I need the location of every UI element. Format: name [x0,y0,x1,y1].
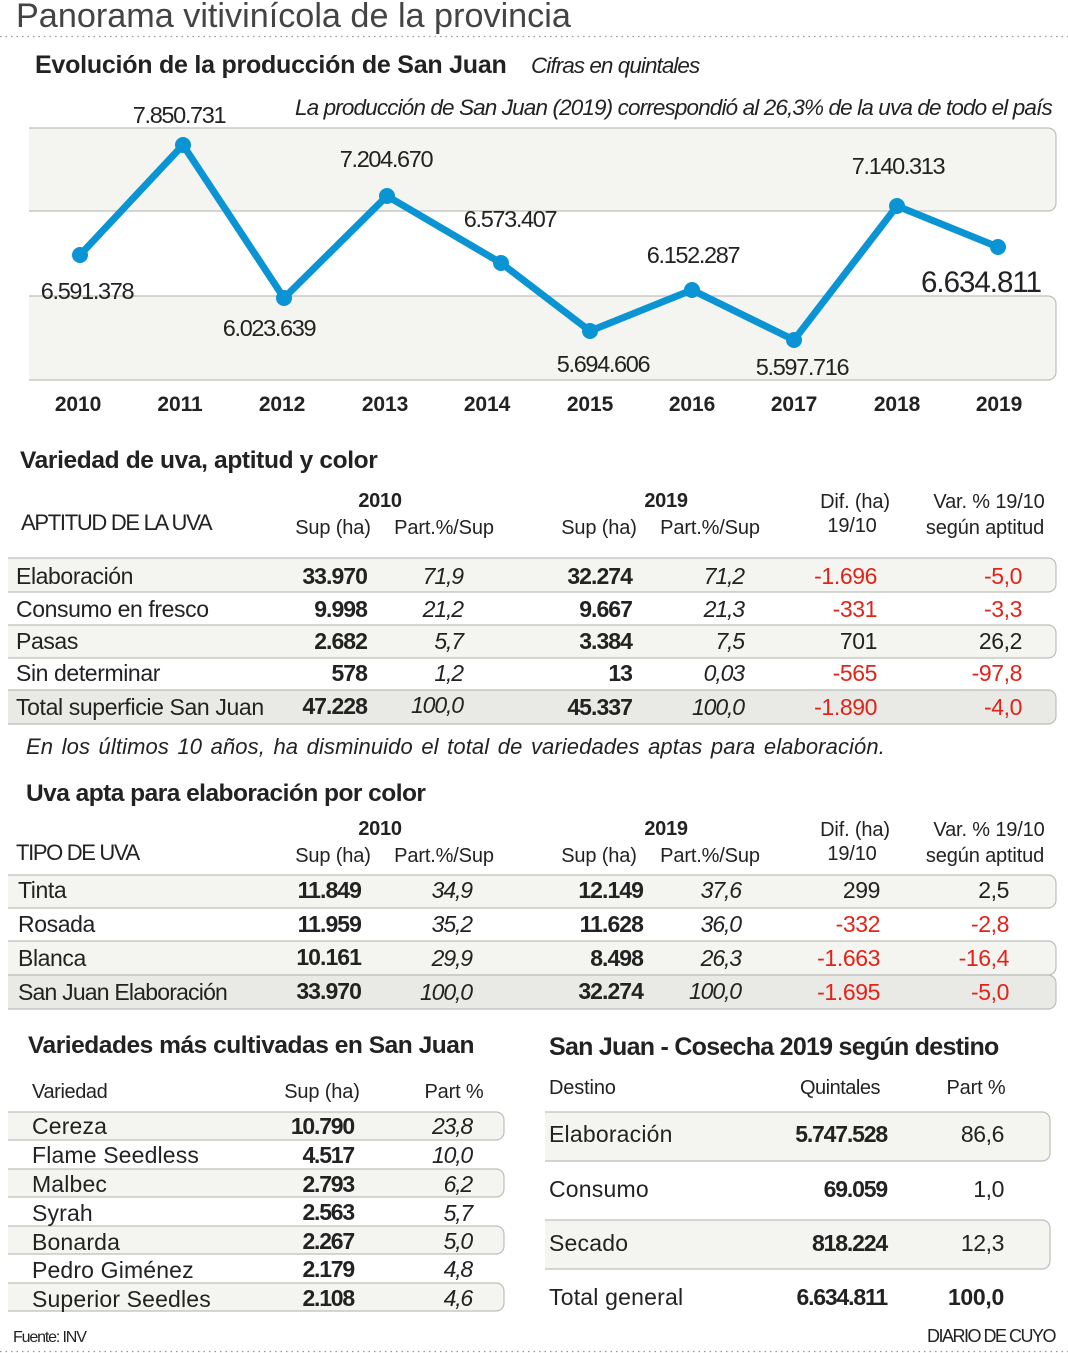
table header: Destino [549,1077,616,1099]
x axis years: 2014 [464,393,511,416]
row: Sin determinar: 1,2 [434,660,464,686]
row: Bonarda: 2.267 [302,1228,354,1254]
table header: 2019 [644,490,688,512]
data labels: 5.694.606 [557,351,650,377]
heading: varieties: Variedades más cultivadas en San Juan [28,1032,474,1059]
row: Syrah: 5,7 [444,1200,474,1226]
note: share of national grape: La producción de San Juan (2019) correspondió al 26,3% de la uva de todo el país [295,95,1052,120]
row: Sin determinar: 0,03 [704,660,745,686]
row: Syrah [32,1199,474,1226]
row: Rosada: 35,2 [432,911,473,937]
row: Pasas: Pasas [16,628,78,654]
row: San Juan Elaboración: 33.970 [296,978,361,1004]
row: San Juan Elaboración: San Juan Elaboración [18,979,227,1005]
row: Elaboración: 71,2 [704,563,745,589]
table header: Part.%/Sup [660,845,760,867]
row: Cereza: 23,8 [431,1113,473,1139]
table header: Var. % 19/10 [933,491,1045,513]
panel: most cultivated varieties [8,1032,504,1312]
row: Elaboración: 5.747.528 [795,1121,888,1147]
table header: Part % [424,1081,484,1103]
data labels: 6.573.407 [464,206,556,232]
row: Elaboración [16,563,1022,589]
row: Sin determinar: -565 [833,660,877,686]
table row bands [8,1112,504,1311]
heading: colour table: Uva apta para elaboración por color [26,780,426,807]
panel: grape variety, aptitude [8,447,1056,759]
row: Consumo: 69.059 [824,1176,887,1202]
table header [16,818,1045,867]
row: Blanca: -1.663 [817,945,880,971]
data labels: 7.204.670 [340,146,433,172]
row: Total superficie San Juan: 45.337 [567,694,632,720]
note: elaboration decline: En los últimos 10 años, ha disminuido el total de variedades aptas para elaboración. [26,734,885,759]
table header: Sup (ha) [295,845,371,867]
row: Flame Seedless [32,1142,473,1168]
row: Sin determinar: 13 [608,660,632,686]
row: Sin determinar: Sin determinar [16,660,161,686]
row: Elaboración: -1.696 [814,563,877,589]
line chart: production 2010-2019 [72,137,1006,348]
table row bands [8,558,1056,724]
row: Tinta: 34,9 [432,877,473,903]
row: Consumo en fresco: 21,2 [422,596,464,622]
row: San Juan Elaboración: 32.274 [578,978,644,1004]
row: Total superficie San Juan: 47.228 [302,693,368,719]
row: Elaboración [549,1121,1004,1147]
row: Rosada: -332 [836,911,880,937]
table header: Variedad [32,1081,107,1103]
row: Superior Seedles: 2.108 [302,1285,355,1311]
row: Total general: Total general [549,1284,683,1310]
x axis years [55,393,1022,416]
table row bands [8,875,1056,1009]
table header: Sup (ha) [561,517,637,539]
table row bands [545,1112,1050,1269]
row: Consumo en fresco [16,596,1022,622]
row: Total superficie San Juan: Total superficie San Juan [16,694,264,720]
x axis years: 2013 [362,393,408,416]
row: Elaboración: -5,0 [984,563,1022,589]
panel: 2019 harvest by destination [545,1033,1050,1310]
row: Elaboración: 86,6 [961,1121,1004,1147]
row: Consumo en fresco: -331 [833,596,877,622]
x axis years: 2015 [567,393,614,416]
table header: Dif. (ha) [820,491,890,513]
data labels [41,102,1041,380]
row: Sin determinar [16,660,1022,686]
row: Consumo: Consumo [549,1176,649,1202]
row: Blanca: 26,3 [700,945,742,971]
row: Bonarda: Bonarda [32,1229,120,1255]
row: Tinta: Tinta [18,877,67,903]
table header: Dif. (ha) [820,819,890,841]
table header: Part.%/Sup [660,517,760,539]
row: San Juan Elaboración: 100,0 [689,978,742,1004]
row: Blanca: 29,9 [431,945,473,971]
row: San Juan Elaboración: 100,0 [420,979,473,1005]
row: Tinta: 11.849 [298,877,361,903]
row: Total superficie San Juan: -4,0 [984,694,1022,720]
row: Sin determinar: -97,8 [972,660,1022,686]
row: Blanca: 10.161 [296,944,362,970]
row: Pasas [16,628,1022,654]
row: Rosada: 11.628 [580,911,644,937]
row: Total general: 6.634.811 [796,1284,888,1310]
table header: Var. % 19/10 [933,819,1045,841]
row: Tinta: 12.149 [578,877,643,903]
subtitle: units: Cifras en quintales [531,53,700,78]
row: Rosada: 36,0 [701,911,742,937]
data labels: 7.850.731 [133,102,225,128]
table header: TIPO DE UVA [16,840,141,865]
table header: 19/10 [827,515,877,537]
table header: 2010 [358,818,402,840]
table header: 2019 [644,818,688,840]
table header: Part.%/Sup [394,845,494,867]
row: Pasas: 26,2 [979,628,1022,654]
row: Total superficie San Juan: 100,0 [411,692,464,718]
row: Consumo en fresco: Consumo en fresco [16,596,209,622]
table header [549,1077,1006,1099]
row: San Juan Elaboración: -1.695 [817,979,880,1005]
x axis years: 2016 [669,393,715,416]
source: Fuente: INV [13,1329,87,1346]
row: Secado: 12,3 [961,1230,1004,1256]
row: Elaboración: Elaboración [16,563,133,589]
row: Pedro Giménez: 2.179 [302,1256,354,1282]
row: Total superficie San Juan: -1.890 [814,694,877,720]
credit: DIARIO DE CUYO [927,1326,1056,1346]
table header: 19/10 [827,843,877,865]
panel: production evolution [29,51,1056,416]
row: Pedro Giménez [32,1256,473,1283]
row: Pasas: 3.384 [579,628,633,654]
row: Cereza: Cereza [32,1113,107,1139]
row: Blanca: -16,4 [959,945,1010,971]
table header: Quintales [800,1077,880,1099]
row: Pedro Giménez: 4,8 [444,1256,473,1282]
row: Flame Seedless: 10,0 [432,1142,473,1168]
table header: Sup (ha) [295,517,371,539]
row: Blanca [18,944,1010,971]
table header: según aptitud [926,845,1044,867]
row: Blanca: Blanca [18,945,87,971]
data labels: 7.140.313 [852,153,945,179]
data labels: 6.634.811 [921,266,1041,299]
row: Secado [549,1230,1004,1256]
row: Consumo: 1,0 [973,1176,1004,1202]
heading: production evolution: Evolución de la producción de San Juan [35,51,507,79]
x axis years: 2017 [771,393,817,416]
row: Tinta [18,877,1009,903]
row: Rosada [18,911,1009,937]
row: Elaboración: 33.970 [302,563,367,589]
row: Rosada: Rosada [18,911,95,937]
row: Tinta: 37,6 [701,877,742,903]
row: Flame Seedless: Flame Seedless [32,1142,199,1168]
data labels: 6.023.639 [223,315,315,341]
row: Blanca: 8.498 [590,945,644,971]
row: Consumo en fresco: 9.998 [314,596,368,622]
data labels: 6.152.287 [647,242,739,268]
row: Tinta: 299 [843,877,880,903]
row: Malbec [32,1171,473,1197]
row: Pedro Giménez: Pedro Giménez [32,1257,194,1283]
x axis years: 2011 [157,393,203,416]
row: Cereza: 10.790 [291,1113,354,1139]
row: Consumo en fresco: -3,3 [984,596,1022,622]
row: San Juan Elaboración: -5,0 [971,979,1009,1005]
row: Bonarda [32,1228,473,1255]
x axis years: 2018 [874,393,921,416]
row: Elaboración: 71,9 [423,563,464,589]
table header: 2010 [358,490,402,512]
row: Total superficie San Juan [16,692,1022,720]
row: Cereza [32,1113,473,1139]
row: Flame Seedless: 4.517 [302,1142,354,1168]
row: Malbec: 6,2 [444,1171,473,1197]
row: Consumo en fresco: 21,3 [703,596,745,622]
table header [21,490,1045,539]
row: Rosada: 11.959 [298,911,361,937]
data labels: 6.591.378 [41,278,134,304]
row: Syrah: Syrah [32,1200,93,1226]
panel: grapes by colour [8,780,1056,1009]
row: Malbec: 2.793 [302,1171,354,1197]
row: Elaboración: 32.274 [567,563,633,589]
row: Superior Seedles [32,1285,473,1312]
row: Pasas: 5,7 [434,628,465,654]
row: Pasas: 7,5 [715,628,745,654]
row: San Juan Elaboración [18,978,1009,1005]
heading: destination: San Juan - Cosecha 2019 según destino [549,1033,999,1061]
row: Syrah: 2.563 [302,1199,354,1225]
table header: Part.%/Sup [394,517,494,539]
row: Consumo en fresco: 9.667 [579,596,632,622]
row: Consumo [549,1176,1004,1202]
row: Malbec: Malbec [32,1171,107,1197]
row: Elaboración: Elaboración [549,1121,673,1147]
table header: Sup (ha) [284,1081,360,1103]
row: Total superficie San Juan: 100,0 [692,694,745,720]
row: Secado: Secado [549,1230,628,1256]
row: Total general: 100,0 [948,1284,1004,1310]
row: Pasas: 2.682 [314,628,367,654]
row: Superior Seedles: 4,6 [444,1285,473,1311]
row: Secado: 818.224 [812,1230,888,1256]
row: Rosada: -2,8 [971,911,1009,937]
row: Superior Seedles: Superior Seedles [32,1286,211,1312]
row: Total general [549,1284,1004,1310]
x axis years: 2012 [259,393,305,416]
row: Bonarda: 5,0 [444,1228,473,1254]
table header: Part % [946,1077,1006,1099]
x axis years: 2019 [976,393,1022,416]
heading: variety table: Variedad de uva, aptitud y color [20,447,378,474]
data labels: 5.597.716 [756,354,849,380]
table header: según aptitud [926,517,1044,539]
x axis years: 2010 [55,393,101,416]
table header: APTITUD DE LA UVA [21,510,213,535]
table header [32,1081,484,1103]
row: Pasas: 701 [840,628,877,654]
row: Tinta: 2,5 [978,877,1009,903]
row: Sin determinar: 578 [331,660,368,686]
table header: Sup (ha) [561,845,637,867]
chart background bands [29,128,1056,380]
